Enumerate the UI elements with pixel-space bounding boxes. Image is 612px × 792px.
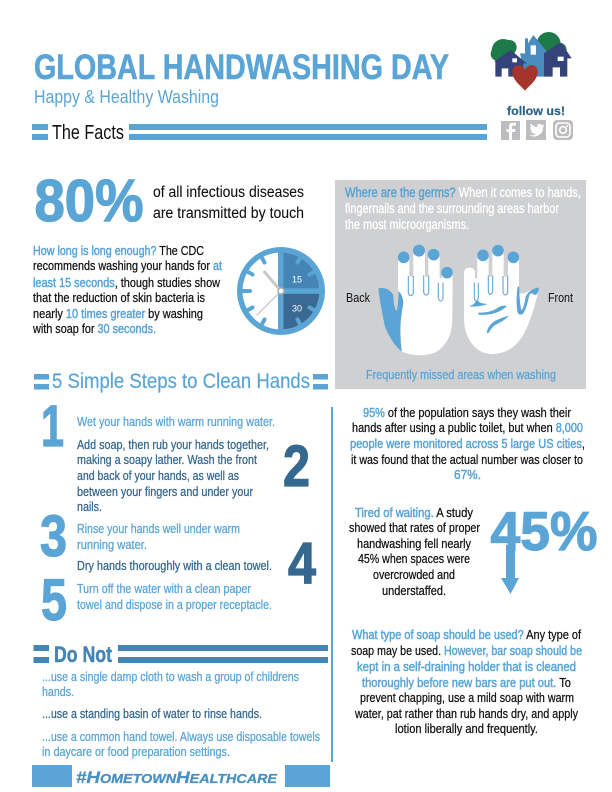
text: tired of waiting: overcrowded and bbox=[373, 567, 455, 582]
text: 95 percent fact: 67%. bbox=[454, 467, 481, 482]
text: 95 percent fact bbox=[350, 405, 585, 482]
text: tired of waiting: understaffed. bbox=[382, 583, 446, 598]
step 2 text bbox=[77, 437, 269, 514]
step 3 number: 3 bbox=[40, 504, 67, 569]
step 3 text: Rinse your hands well under warm bbox=[77, 521, 240, 536]
text: how long is long enough: with soap for 30 seconds. bbox=[32, 321, 156, 336]
step 2 text: making a soapy lather. Wash the front bbox=[77, 452, 257, 467]
text: how long is long enough: nearly 10 times greater by washing bbox=[33, 306, 203, 321]
text: tired of waiting: 45% when spaces were bbox=[358, 551, 470, 566]
title: GLOBAL HANDWASHING DAY bbox=[34, 47, 449, 87]
icon: clock: 30 bbox=[292, 304, 302, 314]
text: germs intro: the most microorganisms. bbox=[345, 217, 469, 232]
step 1 number: 1 bbox=[41, 394, 64, 459]
text: what type of soap: soap may be used. However, bar soap should be bbox=[351, 643, 582, 658]
text: tired of waiting: showed that rates of proper bbox=[349, 520, 480, 535]
icon: clock bbox=[237, 247, 325, 335]
text: germs intro: Where are the germs? When it comes to hands, bbox=[345, 185, 581, 200]
label: front: Front bbox=[548, 291, 573, 305]
caption: frequently missed areas: Frequently missed areas when washing bbox=[366, 367, 556, 382]
heading: The Facts bbox=[32, 122, 487, 144]
text: how long is long enough: How long is long enough? The CDC bbox=[33, 243, 204, 258]
icon: social media bbox=[501, 120, 573, 140]
stat: 45 percent with down arrow: 45% bbox=[490, 500, 598, 562]
subtitle: Happy & Healthy Washing bbox=[34, 86, 219, 107]
footer hashtag banner: #HOMETOWN HEALTHCARE bbox=[76, 768, 277, 787]
step 3 text bbox=[77, 521, 240, 552]
text: how long is long enough bbox=[32, 243, 222, 336]
text: 95 percent fact: hands after using a public toilet, but when 8,000 bbox=[352, 420, 583, 435]
step 4 text: Dry hands thoroughly with a clean towel. bbox=[77, 558, 272, 573]
step 2 text: and back of your hands, as well as bbox=[77, 468, 239, 483]
text: how long is long enough: recommends washing your hands for at bbox=[33, 258, 222, 273]
text: 95 percent fact: 95% of the population says they wash their bbox=[363, 405, 572, 420]
panel: where are the germs bbox=[335, 180, 586, 389]
text: tired of waiting: handwashing fell nearly bbox=[357, 536, 471, 551]
heading: do not bbox=[34, 642, 328, 667]
step 2 text: Add soap, then rub your hands together, bbox=[77, 437, 269, 452]
text: germs intro bbox=[345, 185, 581, 232]
footer hashtag banner bbox=[32, 765, 330, 787]
step 3 text: running water. bbox=[77, 537, 147, 552]
step 5 number: 5 bbox=[41, 568, 67, 633]
do not item: damp cloth: hands. bbox=[42, 684, 74, 699]
text: 80 percent caption: are transmitted by touch bbox=[153, 205, 304, 222]
do not item: damp cloth: ...use a single damp cloth to wash a group of childrens bbox=[42, 669, 299, 684]
do not item: common towel bbox=[42, 729, 320, 759]
stat: 45 percent with down arrow bbox=[490, 500, 598, 594]
step 2 text: between your fingers and under your bbox=[77, 484, 253, 499]
step 5 text: Turn off the water with a clean paper bbox=[77, 581, 251, 596]
step 1 text: Wet your hands with warm running water. bbox=[77, 414, 275, 429]
icon: palm of hand bbox=[464, 245, 539, 354]
text: what type of soap: What type of soap should be used? Any type of bbox=[352, 627, 581, 642]
text: what type of soap: kept in a self-draining holder that is cleaned bbox=[357, 659, 576, 674]
step 5 text: towel and dispose in a proper receptacle. bbox=[77, 597, 272, 612]
do not item: damp cloth bbox=[42, 669, 299, 699]
follow us label: follow us! bbox=[507, 104, 565, 118]
text: 80 percent caption: of all infectious diseases bbox=[153, 184, 304, 201]
heading: do not: Do Not bbox=[54, 642, 112, 667]
text: what type of soap: lotion liberally and frequently. bbox=[395, 721, 538, 736]
step 2 text: nails. bbox=[77, 499, 102, 514]
text: tired of waiting: Tired of waiting. A study bbox=[355, 505, 473, 520]
text: how long is long enough: least 15 seconds, though studies show bbox=[33, 275, 220, 290]
text: how long is long enough: that the reduction of skin bacteria is bbox=[33, 290, 205, 305]
text: 80 percent caption bbox=[153, 184, 304, 222]
icon: back of hand bbox=[378, 245, 453, 355]
heading: 5 simple steps: 5 Simple Steps to Clean Hands bbox=[52, 370, 310, 393]
do not item: standing basin: ...use a standing basin of water to rinse hands. bbox=[42, 706, 262, 721]
step 5 text bbox=[77, 581, 272, 612]
heading: The Facts: The Facts bbox=[52, 122, 124, 144]
icon: clock: 15 bbox=[292, 274, 302, 284]
stat: 80 percent: 80% bbox=[34, 168, 144, 234]
icon: hometown houses and heart logo bbox=[491, 32, 572, 91]
do not item: common towel: ...use a common hand towel. Always use disposable towels bbox=[42, 729, 320, 744]
text: germs intro: fingernails and the surrounding areas harbor bbox=[345, 201, 559, 216]
text: what type of soap: thoroughly before new bars are put out. To bbox=[362, 675, 571, 690]
label: back: Back bbox=[346, 291, 371, 305]
do not item: common towel: in daycare or food preparation settings. bbox=[42, 744, 230, 759]
step 2 number: 2 bbox=[283, 434, 310, 499]
text: tired of waiting bbox=[349, 505, 480, 598]
step 4 number: 4 bbox=[288, 531, 316, 596]
text: what type of soap bbox=[351, 627, 582, 736]
